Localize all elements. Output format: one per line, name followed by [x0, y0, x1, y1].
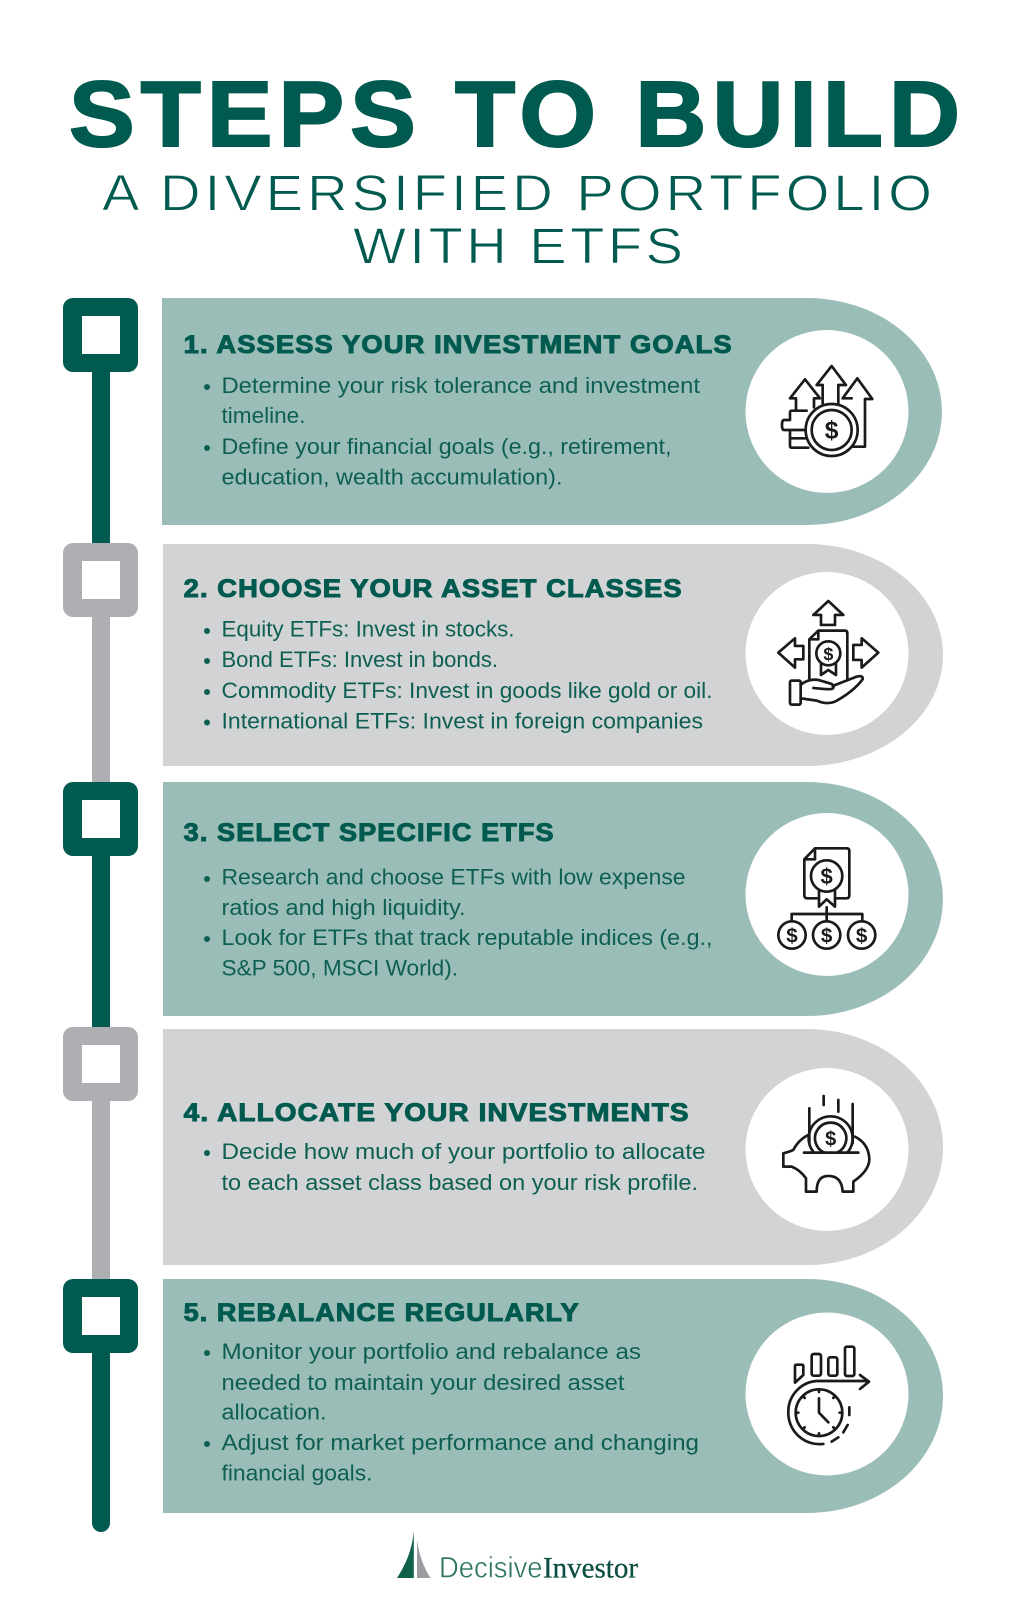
text block: step 3: Look for ETFs that track reputable indices (e.g.,: [222, 925, 712, 950]
logo wordmark: Decisive: [439, 1552, 542, 1584]
text block: step 5: allocation.: [222, 1400, 326, 1424]
text block: step 1: Define your financial goals (e.g., retirement,: [222, 434, 672, 459]
logo: DecisiveInvestor: [397, 1531, 638, 1584]
text block: step 2: Equity ETFs: Invest in stocks.: [222, 617, 514, 642]
text block: step 5: needed to maintain your desired asset: [222, 1370, 625, 1395]
text block: step 4: Decide how much of your portfolio to allocate: [222, 1139, 706, 1164]
icon: rising arrows and coins: [746, 330, 908, 493]
logo wordmark: Investor: [543, 1552, 638, 1584]
text block: step 4: [204, 1139, 706, 1195]
icon: certificate branching to coins: [746, 813, 908, 976]
text block: step 1: timeline.: [222, 403, 306, 428]
node 5: [63, 1279, 138, 1353]
subtitle line 1: A DIVERSIFIED PORTFOLIO: [102, 165, 932, 222]
text block: step 3: ratios and high liquidity.: [222, 895, 466, 920]
subtitle line 2: WITH ETFS: [353, 218, 683, 275]
panel: step 5: [163, 1279, 943, 1513]
heading: step 5: 5. REBALANCE REGULARLY: [184, 1299, 580, 1327]
text block: step 1: Determine your risk tolerance and investment: [222, 373, 701, 398]
logo wordmark: [439, 1552, 638, 1584]
heading: step 1: 1. ASSESS YOUR INVESTMENT GOALS: [184, 331, 733, 359]
logo mark: sails: [397, 1531, 430, 1578]
text block: step 5: financial goals.: [222, 1460, 372, 1486]
icon: certificate branching to coins: $: [821, 864, 833, 889]
text block: step 2: Commodity ETFs: Invest in goods like gold or oil.: [222, 678, 712, 703]
panel: step 4: [163, 1029, 943, 1265]
heading: step 3: 3. SELECT SPECIFIC ETFS: [184, 819, 555, 847]
node 4: [63, 1027, 138, 1101]
title: [69, 63, 960, 275]
text block: step 3: S&P 500, MSCI World).: [222, 956, 458, 980]
text block: step 4: to each asset class based on your risk profile.: [222, 1170, 698, 1195]
icon: certificate branching to coins: $: [786, 925, 798, 948]
icon: hand holding certificate with arrows: [746, 572, 908, 735]
text block: step 1: education, wealth accumulation).: [222, 464, 562, 490]
text block: step 5: Monitor your portfolio and rebalance as: [222, 1339, 641, 1364]
node 2: [63, 543, 138, 617]
node 3: [63, 782, 138, 856]
heading: step 4: 4. ALLOCATE YOUR INVESTMENTS: [184, 1099, 690, 1127]
icon: clock and growing bars: [746, 1312, 908, 1476]
icon: rising arrows and coins: $: [825, 418, 839, 445]
text block: step 2: International ETFs: Invest in foreign companies: [222, 708, 703, 734]
timeline: [63, 298, 138, 1532]
text block: step 2: [204, 617, 712, 734]
text block: step 5: Adjust for market performance and changing: [222, 1430, 699, 1455]
icon: piggy bank with coin: [746, 1068, 908, 1231]
panel: step 2: [163, 544, 943, 766]
panel: step 1: [162, 298, 942, 525]
icon: certificate branching to coins: $: [821, 925, 833, 948]
node 1: [63, 298, 138, 372]
icon: certificate branching to coins: $: [856, 925, 868, 948]
text block: step 3: [204, 865, 712, 980]
text block: step 2: Bond ETFs: Invest in bonds.: [222, 647, 498, 672]
text block: step 5: [204, 1339, 699, 1486]
text block: step 1: [204, 373, 701, 490]
icon: hand holding certificate with arrows: $: [823, 644, 833, 664]
text block: step 3: Research and choose ETFs with low expense: [222, 865, 686, 890]
icon: piggy bank with coin: $: [825, 1128, 836, 1150]
panel: step 3: [163, 782, 943, 1016]
heading: step 2: 2. CHOOSE YOUR ASSET CLASSES: [184, 575, 683, 603]
title line: steps to build: STEPS TO BUILD: [69, 63, 960, 166]
